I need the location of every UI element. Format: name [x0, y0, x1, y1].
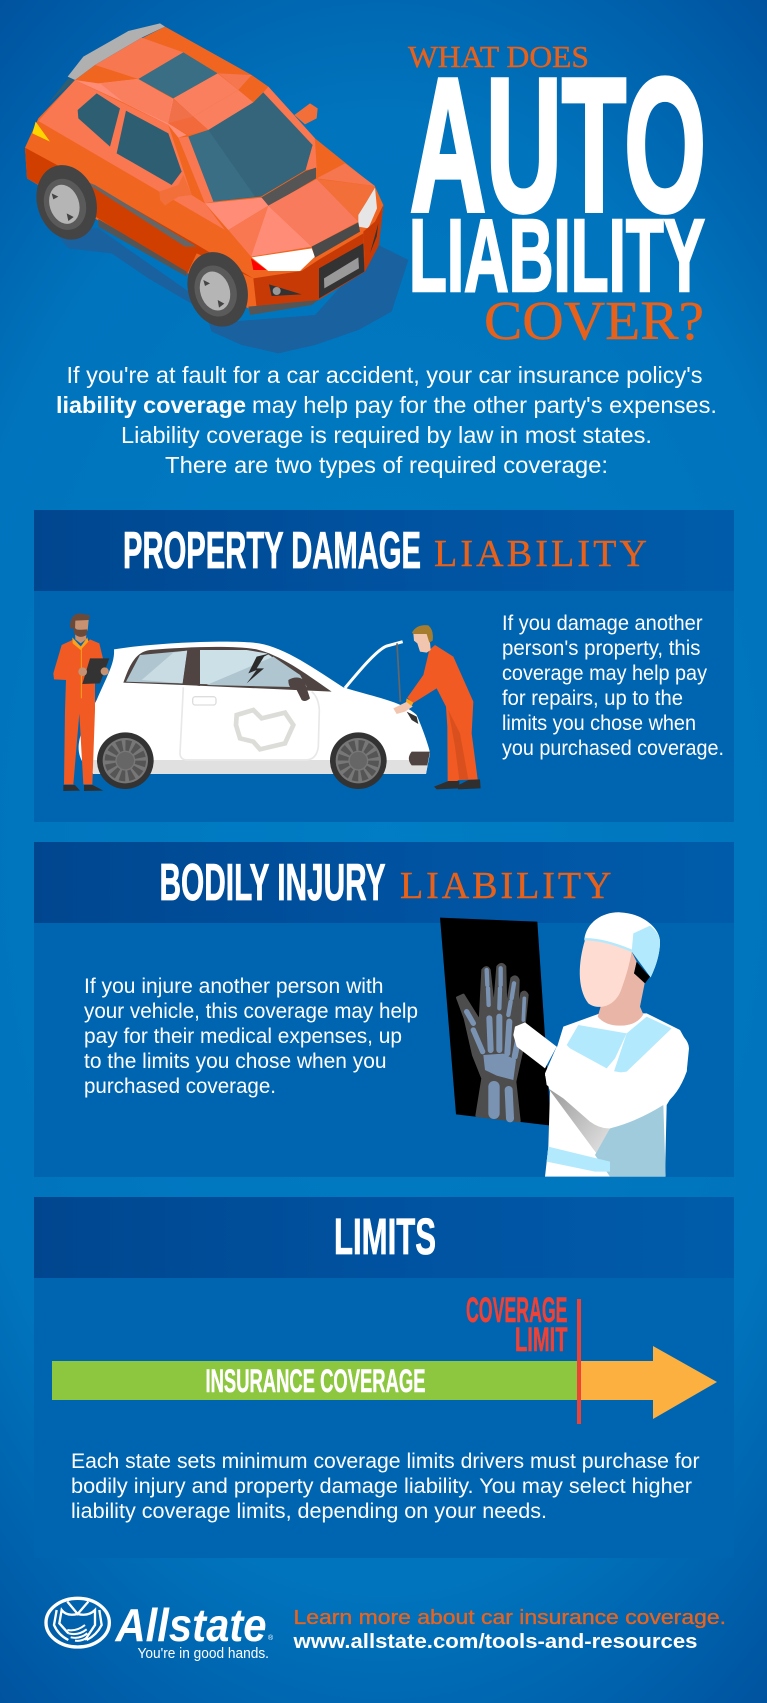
- property damage text: If you damage another: [502, 612, 702, 635]
- call to action: Learn more about car insurance coverage.: [294, 1606, 726, 1629]
- bodily injury text: to the limits you chose when you: [84, 1050, 386, 1073]
- title: COVER?: [484, 290, 704, 351]
- illustration: mechanics inspecting damaged white car: [53, 613, 481, 791]
- left mechanic: [53, 613, 109, 791]
- heading: bodily injury: BODILY INJURY: [160, 854, 386, 912]
- intro text: liability coverage: [56, 392, 246, 418]
- title: [408, 40, 706, 351]
- property damage text: for repairs, up to the: [502, 687, 683, 710]
- panel: property damage liability: [34, 510, 734, 822]
- logo: Allstate: [46, 1598, 274, 1662]
- logo: Allstate: ®: [268, 1634, 274, 1642]
- bodily injury text: your vehicle, this coverage may help: [84, 1000, 418, 1023]
- property damage text: [502, 612, 724, 760]
- intro text: If you're at fault for a car accident, your car insurance policy's: [66, 362, 703, 388]
- property damage text: you purchased coverage.: [502, 737, 724, 760]
- icon: good hands emblem: [46, 1598, 109, 1647]
- property damage text: coverage may help pay: [502, 662, 707, 685]
- chart: insurance coverage arrow: COVERAGE: [466, 1291, 568, 1330]
- chart: insurance coverage arrow: INSURANCE COVERAGE: [206, 1363, 426, 1399]
- chart: insurance coverage arrow: LIMIT: [515, 1321, 568, 1359]
- call to action: www.allstate.com/tools-and-resources: [292, 1630, 698, 1653]
- title: WHAT DOES: [408, 40, 589, 74]
- panel: bodily injury liability: [34, 842, 734, 1177]
- heading: limits: [34, 1197, 734, 1278]
- heading: property damage: [34, 510, 734, 591]
- intro text: may help pay for the other party's expenses.: [252, 392, 717, 418]
- limits text: bodily injury and property damage liability. You may select higher: [71, 1475, 692, 1498]
- right mechanic: [393, 625, 481, 789]
- heading: limits: LIMITS: [334, 1208, 436, 1265]
- property damage text: person's property, this: [502, 637, 700, 660]
- logo: Allstate: You're in good hands.: [138, 1645, 269, 1662]
- limits text: liability coverage limits, depending on your needs.: [71, 1500, 547, 1523]
- bodily injury text: [84, 975, 418, 1098]
- heading: property damage: PROPERTY DAMAGE: [123, 522, 421, 580]
- intro text: Liability coverage is required by law in most states.: [121, 422, 652, 448]
- property damage text: limits you chose when: [502, 712, 696, 735]
- bodily injury text: purchased coverage.: [84, 1075, 276, 1098]
- illustration: doctor holding hand x-ray: [440, 912, 689, 1177]
- bodily injury text: pay for their medical expenses, up: [84, 1025, 402, 1048]
- heading: bodily injury: [34, 842, 734, 923]
- intro text: There are two types of required coverage:: [165, 452, 608, 478]
- logo: Allstate: Allstate: [115, 1599, 266, 1651]
- limits text: Each state sets minimum coverage limits drivers must purchase for: [71, 1450, 700, 1473]
- heading: bodily injury: LIABILITY: [400, 865, 612, 907]
- limits text: [71, 1450, 700, 1523]
- chart: insurance coverage arrow: [52, 1291, 717, 1424]
- call to action: [292, 1606, 726, 1653]
- heading: property damage: LIABILITY: [434, 533, 647, 575]
- icon: orange SUV illustration: [25, 23, 408, 353]
- bodily injury text: If you injure another person with: [84, 975, 384, 998]
- panel: limits: [34, 1197, 734, 1558]
- intro text: [56, 362, 717, 478]
